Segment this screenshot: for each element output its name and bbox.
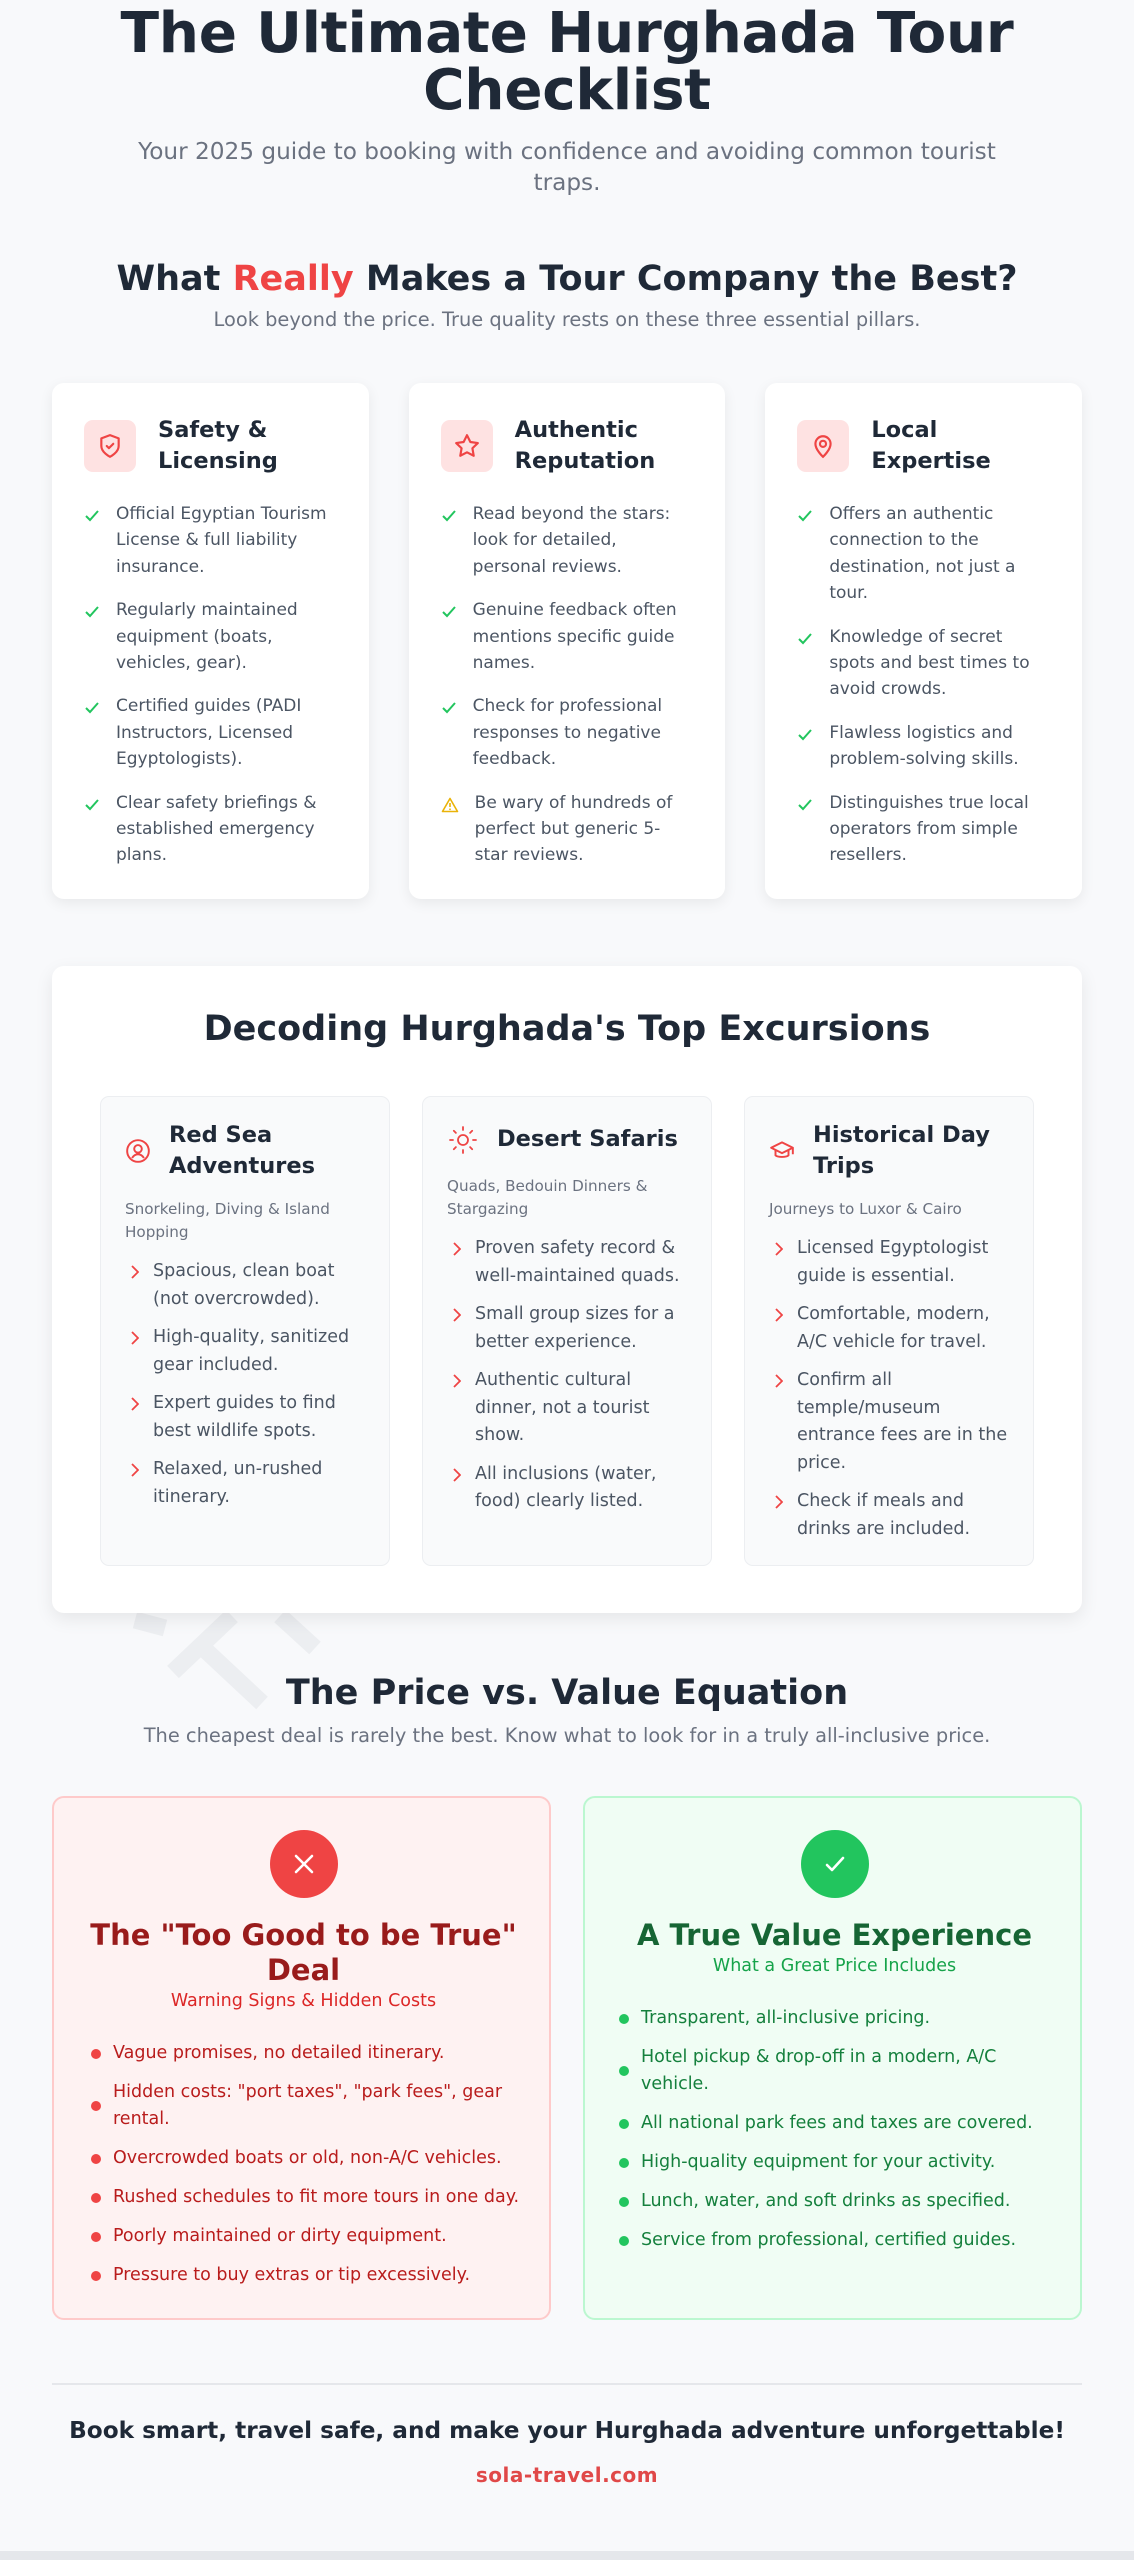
- card: desert safaris: Desert Safaris: [497, 1126, 678, 1152]
- heading: what really makes: What Really Makes a Tour Company the Best?: [116, 259, 1018, 299]
- subtitle: Your 2025 guide to booking with confidence and avoiding common tourist: [138, 138, 996, 165]
- card: historical day trips: [744, 1096, 1034, 1566]
- card header: expertise: Local: [871, 417, 937, 443]
- panel: safety & licensing: [52, 383, 369, 899]
- footer tagline: Book smart, travel safe, and make your Hurghada adventure unforgettable!: [69, 2417, 1065, 2444]
- card: red sea: Relaxed, un-rushed itinerary.: [153, 1459, 322, 1506]
- card header: reputation: [441, 417, 655, 474]
- panel: authentic reputation: Be wary of hundreds of perfect but generic 5-star reviews.: [475, 793, 672, 865]
- panel: authentic reputation: [409, 383, 725, 899]
- card: historical day trips: Check if meals and drinks are included.: [797, 1491, 970, 1538]
- card: red sea: Adventures: [169, 1153, 315, 1179]
- card header: expertise: [797, 417, 991, 474]
- panel: true value: High-quality equipment for your activity.: [641, 2152, 995, 2172]
- card: red sea: Red Sea: [169, 1122, 272, 1148]
- panel: too good to be true: The "Too Good to be True": [90, 1918, 517, 1952]
- panel: authentic reputation: Read beyond the stars: look for detailed, personal reviews.: [473, 504, 670, 577]
- subheading: pillars: Look beyond the price. True quality rests on these three essential pillars.: [214, 308, 920, 331]
- panel: too good to be true: Vague promises, no detailed itinerary.: [113, 2043, 444, 2063]
- icon: red x: [270, 1830, 338, 1898]
- watermark: [133, 1613, 320, 1709]
- card: desert safaris: Proven safety record & well-maintained quads.: [475, 1238, 680, 1286]
- card: desert safaris: [422, 1096, 712, 1566]
- card: historical day trips: Trips: [813, 1153, 874, 1179]
- pillars row: [54, 417, 1080, 903]
- panel: true value: All national park fees and taxes are covered.: [641, 2113, 1033, 2133]
- card: historical day trips: Comfortable, modern, A/C vehicle for travel.: [797, 1304, 990, 1352]
- panel: too good to be true: Deal: [267, 1953, 340, 1987]
- panel: too good to be true: Warning Signs & Hidden Costs: [171, 1991, 436, 2011]
- panel: local expertise: Flawless logistics and problem-solving skills.: [829, 723, 1019, 769]
- panel: local expertise: Offers an authentic connection to the destination, not just a tour.: [829, 504, 1015, 603]
- panel: local expertise: Knowledge of secret spots and best times to avoid crowds.: [829, 627, 1030, 699]
- panel: too good to be true: Overcrowded boats or old, non-A/C vehicles.: [113, 2148, 502, 2168]
- panel: true value: [583, 1796, 1082, 2320]
- subtitle: traps.: [533, 169, 600, 196]
- panel: authentic reputation: Genuine feedback often mentions specific guide names.: [473, 600, 677, 673]
- card header: reputation: Authentic: [515, 417, 638, 443]
- card: red sea: [100, 1096, 390, 1566]
- panel: safety & licensing: Clear safety briefings & established emergency plans.: [116, 793, 316, 865]
- card: red sea: High-quality, sanitized gear included.: [153, 1327, 349, 1374]
- card header: expertise: Expertise: [871, 448, 991, 474]
- panel: true value: What a Great Price Includes: [713, 1956, 956, 1976]
- heading: excursions: Decoding Hurghada's Top Excursions: [204, 1009, 930, 1049]
- title: The Ultimate Hurghada Tour: [121, 1, 1013, 66]
- card header: safety: Safety &: [158, 417, 267, 443]
- icon: green check: [800, 1830, 868, 1898]
- panel: true value: Lunch, water, and soft drinks as specified.: [641, 2191, 1010, 2211]
- heading: price vs value: The Price vs. Value Equation: [286, 1673, 848, 1713]
- panel: authentic reputation: Check for professional responses to negative feedback.: [473, 696, 662, 769]
- card: historical day trips: Journeys to Luxor & Cairo: [769, 1200, 962, 1218]
- panel: too good to be true: [52, 1796, 551, 2320]
- panel: excursions: [52, 966, 1082, 1613]
- panel: too good to be true: Poorly maintained or dirty equipment.: [113, 2226, 447, 2246]
- panel: too good to be true: Hidden costs: "port taxes", "park fees", gear rental.: [113, 2082, 502, 2129]
- card: desert safaris: Small group sizes for a better experience.: [475, 1304, 675, 1352]
- card: red sea: Snorkeling, Diving & Island Hopping: [125, 1200, 330, 1241]
- panel: too good to be true: Pressure to buy extras or tip excessively.: [113, 2265, 470, 2285]
- card: red sea: Spacious, clean boat (not overcrowded).: [153, 1261, 334, 1308]
- subtitle: [138, 138, 996, 196]
- card: red sea: Expert guides to find best wildlife spots.: [153, 1393, 336, 1440]
- panel: safety & licensing: Regularly maintained equipment (boats, vehicles, gear).: [116, 600, 298, 673]
- panel: too good to be true: Rushed schedules to fit more tours in one day.: [113, 2187, 519, 2207]
- card header: safety: Licensing: [158, 448, 278, 474]
- panel: safety & licensing: Official Egyptian Tourism License & full liability insurance.: [116, 504, 327, 577]
- panel: safety & licensing: Certified guides (PADI Instructors, Licensed Egyptologists).: [116, 696, 301, 769]
- card: historical day trips: Licensed Egyptologist guide is essential.: [797, 1238, 988, 1286]
- subheading: price vs value: The cheapest deal is rarely the best. Know what to look for in a truly all-inclusive price.: [144, 1724, 990, 1747]
- card: desert safaris: Quads, Bedouin Dinners & Stargazing: [447, 1177, 647, 1218]
- panel: true value: Transparent, all-inclusive pricing.: [641, 2008, 930, 2028]
- card: historical day trips: Confirm all temple/museum entrance fees are in the price.: [797, 1370, 1007, 1472]
- card: desert safaris: Authentic cultural dinner, not a tourist show.: [475, 1370, 649, 1445]
- panel: local expertise: [765, 383, 1082, 899]
- panel: true value: Service from professional, certified guides.: [641, 2230, 1016, 2250]
- title: [120, 1, 1014, 123]
- title: Checklist: [423, 58, 711, 123]
- card: historical day trips: Historical Day: [813, 1122, 990, 1148]
- card header: reputation: Reputation: [515, 448, 655, 474]
- card: desert safaris: All inclusions (water, food) clearly listed.: [475, 1464, 656, 1511]
- panel: true value: Hotel pickup & drop-off in a modern, A/C vehicle.: [641, 2047, 996, 2094]
- panel: true value: A True Value Experience: [637, 1918, 1032, 1952]
- card header: safety: [84, 417, 278, 474]
- panel: local expertise: Distinguishes true local operators from simple resellers.: [829, 793, 1029, 865]
- comparison cards: [52, 1796, 1082, 2320]
- footer url: sola-travel.com: [476, 2463, 658, 2487]
